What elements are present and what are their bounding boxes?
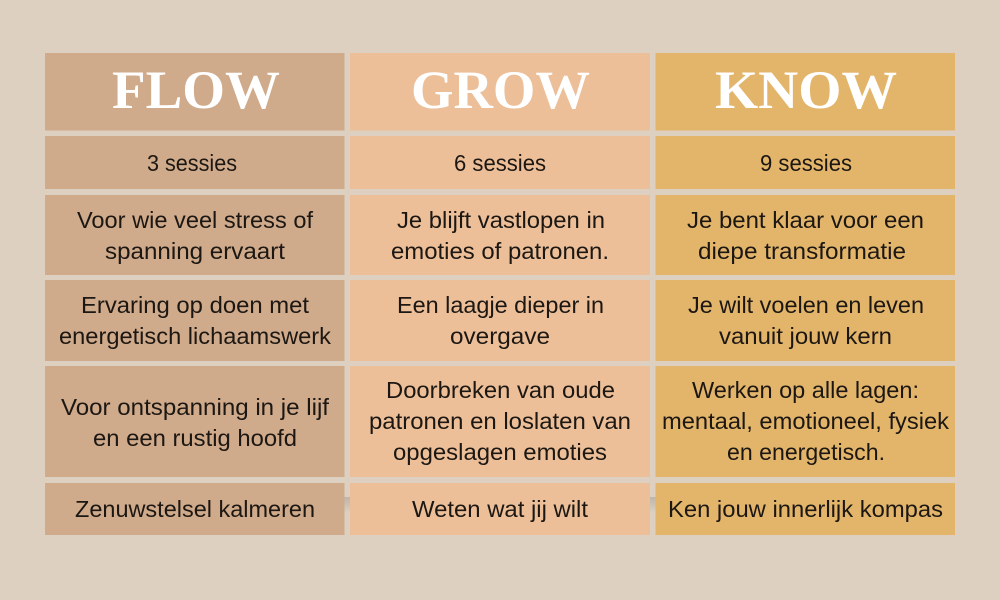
- cell: doorbreken: patronen en loslaten van: [369, 408, 631, 434]
- cell: zenuwstelsel: [45, 483, 344, 535]
- cell: kern: [656, 280, 955, 361]
- cell: vastlopen: Je blijft vastlopen in: [397, 207, 605, 233]
- column: FLOW: [45, 53, 344, 535]
- cell: stress: Voor wie veel stress of: [77, 207, 314, 233]
- cell: 3 sessies: 3 sessies: [147, 150, 237, 176]
- cell: ontspanning: en een rustig hoofd: [93, 425, 297, 451]
- cell: doorbreken: [350, 366, 650, 477]
- cell: kern: Je wilt voelen en leven: [688, 292, 924, 318]
- column: GROW: [350, 53, 650, 535]
- cell: lagen: Werken op alle lagen:: [692, 377, 919, 403]
- header: FLOW: FLOW: [112, 60, 280, 120]
- cell: lagen: en energetisch.: [727, 439, 885, 465]
- cell: stress: spanning ervaart: [105, 238, 286, 264]
- header: KNOW: KNOW: [715, 60, 897, 120]
- cell: doorbreken: opgeslagen emoties: [393, 439, 607, 465]
- column: KNOW: [656, 53, 955, 535]
- header: GROW: [350, 53, 650, 130]
- cell: ervaring: energetisch lichaamswerk: [59, 323, 332, 349]
- cell: vastlopen: [350, 195, 650, 275]
- cell: transformatie: [656, 195, 955, 275]
- cell: ontspanning: Voor ontspanning in je lijf: [61, 394, 330, 420]
- cell: 9 sessies: [656, 136, 955, 189]
- cell: ervaring: [45, 280, 344, 361]
- cell: weten: Weten wat jij wilt: [412, 496, 589, 522]
- cell: 6 sessies: [350, 136, 650, 189]
- cell: stress: [45, 195, 344, 275]
- cell: kompas: Ken jouw innerlijk kompas: [668, 496, 943, 522]
- cell: kompas: [656, 483, 955, 535]
- cell: lagen: [656, 366, 955, 477]
- cell: 9 sessies: 9 sessies: [760, 150, 852, 176]
- cell: lagen: mentaal, emotioneel, fysiek: [662, 408, 950, 434]
- cell: ontspanning: [45, 366, 344, 477]
- cell: weten: [350, 483, 650, 535]
- cell: transformatie: Je bent klaar voor een: [687, 207, 924, 233]
- cell: 3 sessies: [45, 136, 344, 189]
- cell: overgave: Een laagje dieper in: [397, 292, 604, 318]
- header: FLOW: [45, 53, 344, 130]
- cell: vastlopen: emoties of patronen.: [391, 238, 609, 264]
- cell: overgave: [350, 280, 650, 361]
- cell: doorbreken: Doorbreken van oude: [386, 377, 615, 403]
- cell: ervaring: Ervaring op doen met: [81, 292, 310, 318]
- header: GROW: GROW: [411, 60, 590, 120]
- header: KNOW: [656, 53, 955, 130]
- cell: 6 sessies: 6 sessies: [454, 150, 546, 176]
- cell: kern: vanuit jouw kern: [719, 323, 892, 349]
- cell: transformatie: diepe transformatie: [698, 238, 906, 264]
- cell: overgave: overgave: [450, 323, 550, 349]
- cell: zenuwstelsel: Zenuwstelsel kalmeren: [75, 496, 315, 522]
